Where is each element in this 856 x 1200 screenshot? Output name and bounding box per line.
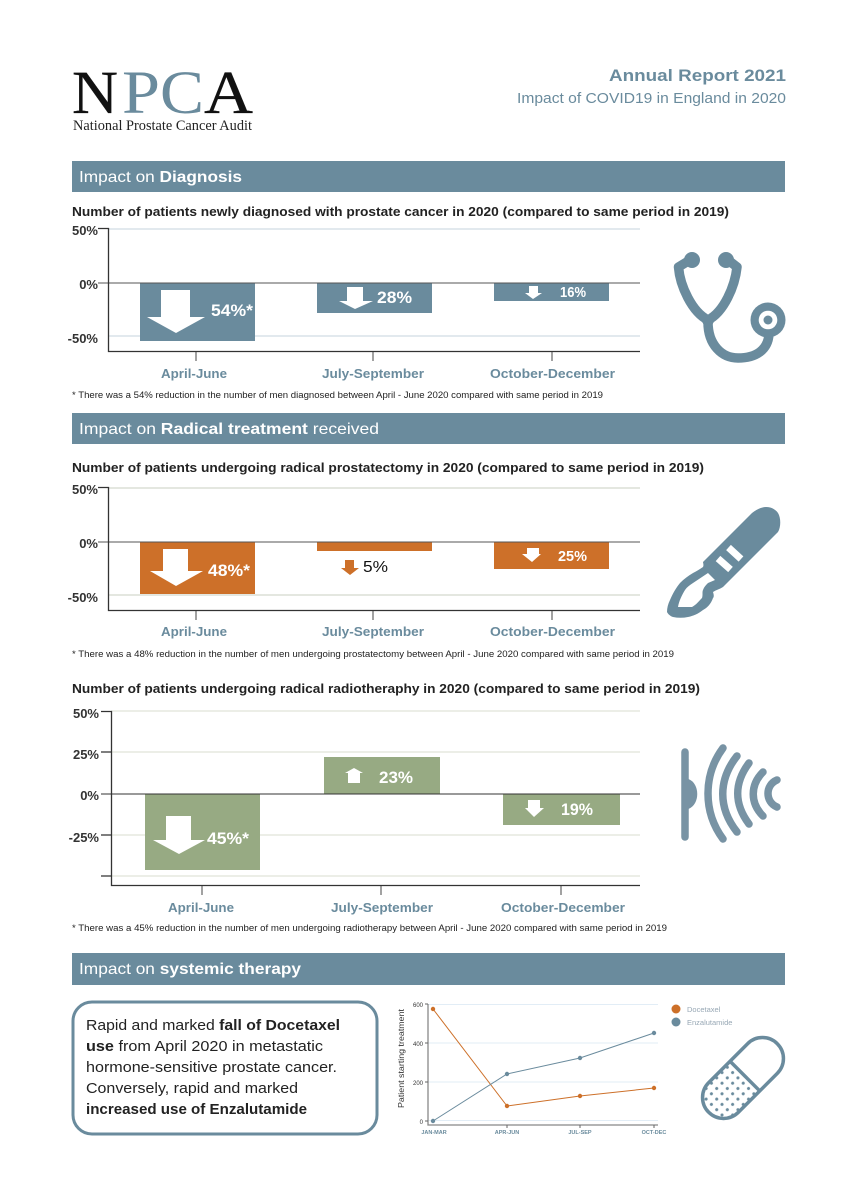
- line chart: treatment starts: JAN-MAR: [421, 1130, 447, 1136]
- section header: diagnosis: Impact on Diagnosis: [79, 169, 242, 186]
- icon: stethoscope: [678, 252, 786, 358]
- bar chart: diagnosis: April-June: [161, 366, 227, 381]
- bar chart: prostatectomy: July-September: [322, 624, 424, 639]
- bar chart: radiotherapy: April-June: [168, 900, 234, 915]
- bar chart: prostatectomy: 25%: [558, 548, 587, 565]
- section header: radical treatment: Impact on Radical treatment received: [79, 421, 379, 438]
- bar chart: diagnosis: -50%: [68, 331, 98, 346]
- section header: systemic therapy: Impact on systemic therapy: [79, 961, 301, 978]
- logo: NPCA: C: [160, 60, 204, 127]
- line chart: treatment starts: 400: [413, 1042, 424, 1048]
- chart heading: prostatectomy: Number of patients undergoing radical prostatectomy in 2020 (compared to same period in 2019): [72, 460, 704, 475]
- bar chart: radiotherapy: 25%: [73, 747, 99, 762]
- bar chart: radiotherapy: [69, 706, 640, 915]
- bar chart: prostatectomy: October-December: [490, 624, 615, 639]
- bar chart: radiotherapy: 0%: [80, 788, 99, 803]
- icon: scalpel: [667, 507, 780, 618]
- line chart: treatment starts: 200: [413, 1081, 424, 1087]
- callout: systemic therapy summary: use from April 2020 in metastatic: [86, 1039, 323, 1055]
- bar chart: prostatectomy: 48%*: [208, 561, 250, 580]
- callout: systemic therapy summary: Conversely, rapid and marked: [86, 1081, 298, 1097]
- bar chart: radiotherapy: July-September: [331, 900, 433, 915]
- line chart: treatment starts: 600: [413, 1003, 424, 1009]
- footnote: * There was a 45% reduction in the number of men undergoing radiotherapy between April - June 2020 compared with same period in 2019: [72, 923, 667, 933]
- logo: NPCA: [72, 60, 253, 134]
- bar chart: prostatectomy: April-June: [161, 624, 227, 639]
- bar chart: diagnosis: 16%: [560, 284, 586, 301]
- legend: Docetaxel: [687, 1005, 721, 1014]
- logo: NPCA: P: [122, 60, 160, 127]
- line chart: treatment starts: 0: [420, 1120, 424, 1126]
- callout: systemic therapy summary: increased use of Enzalutamide: [86, 1102, 307, 1118]
- icon: radiation waves: [685, 748, 777, 839]
- logo: NPCA: A: [204, 60, 253, 127]
- logo: NPCA: N: [72, 60, 118, 127]
- section header: radical treatment: [72, 413, 785, 444]
- chart heading: diagnosed: Number of patients newly diagnosed with prostate cancer in 2020 (compared to same period in 2019): [72, 204, 729, 219]
- bar chart: radiotherapy: 23%: [379, 768, 413, 787]
- legend: Enzalutamide: [687, 1018, 732, 1027]
- bar chart: diagnosis: October-December: [490, 366, 615, 381]
- footnote: * There was a 48% reduction in the number of men undergoing prostatectomy between April - June 2020 compared with same period in 2019: [72, 649, 674, 659]
- bar chart: prostatectomy: [68, 482, 640, 639]
- report title: [517, 66, 786, 107]
- bar chart: diagnosis: 28%: [377, 288, 412, 307]
- line chart: treatment starts: OCT-DEC: [642, 1130, 666, 1136]
- bar chart: diagnosis: 0%: [79, 277, 98, 292]
- bar chart: diagnosis: July-September: [322, 366, 424, 381]
- footnote: * There was a 54% reduction in the number of men diagnosed between April - June 2020 compared with same period in 2019: [72, 390, 603, 400]
- report title: Annual Report 2021: [609, 66, 786, 85]
- line chart: treatment starts: [397, 1003, 666, 1136]
- bar chart: diagnosis: 54%*: [211, 301, 253, 320]
- callout: systemic therapy summary: [73, 1002, 377, 1134]
- bar chart: radiotherapy: 50%: [73, 706, 99, 721]
- line chart: treatment starts: Patient starting treatment: [397, 1008, 406, 1108]
- line chart: treatment starts: APR-JUN: [495, 1130, 519, 1136]
- bar chart: prostatectomy: 50%: [72, 482, 98, 497]
- section header: diagnosis: [72, 161, 785, 192]
- bar chart: radiotherapy: -25%: [69, 830, 99, 845]
- chart heading: radiotherapy: Number of patients undergoing radical radiotheraphy in 2020 (compared to same period in 2019): [72, 681, 700, 696]
- callout: systemic therapy summary: hormone-sensitive prostate cancer.: [86, 1060, 337, 1076]
- section header: systemic therapy: [72, 953, 785, 985]
- bar chart: radiotherapy: 45%*: [207, 829, 249, 848]
- bar chart: radiotherapy: 19%: [561, 800, 593, 819]
- bar chart: prostatectomy: -50%: [68, 590, 98, 605]
- report title: Impact of COVID19 in England in 2020: [517, 90, 786, 107]
- bar chart: diagnosis: [68, 223, 640, 381]
- bar chart: diagnosis: 50%: [72, 223, 98, 238]
- legend: [672, 1004, 732, 1027]
- logo: NPCA: National Prostate Cancer Audit: [73, 118, 252, 134]
- bar chart: prostatectomy: 5%: [363, 559, 388, 576]
- callout: systemic therapy summary: Rapid and marked fall of Docetaxel: [86, 1018, 340, 1034]
- bar chart: radiotherapy: October-December: [501, 900, 625, 915]
- icon: capsule: [694, 1029, 792, 1127]
- line chart: treatment starts: JUL-SEP: [568, 1130, 592, 1136]
- bar chart: prostatectomy: 0%: [79, 536, 98, 551]
